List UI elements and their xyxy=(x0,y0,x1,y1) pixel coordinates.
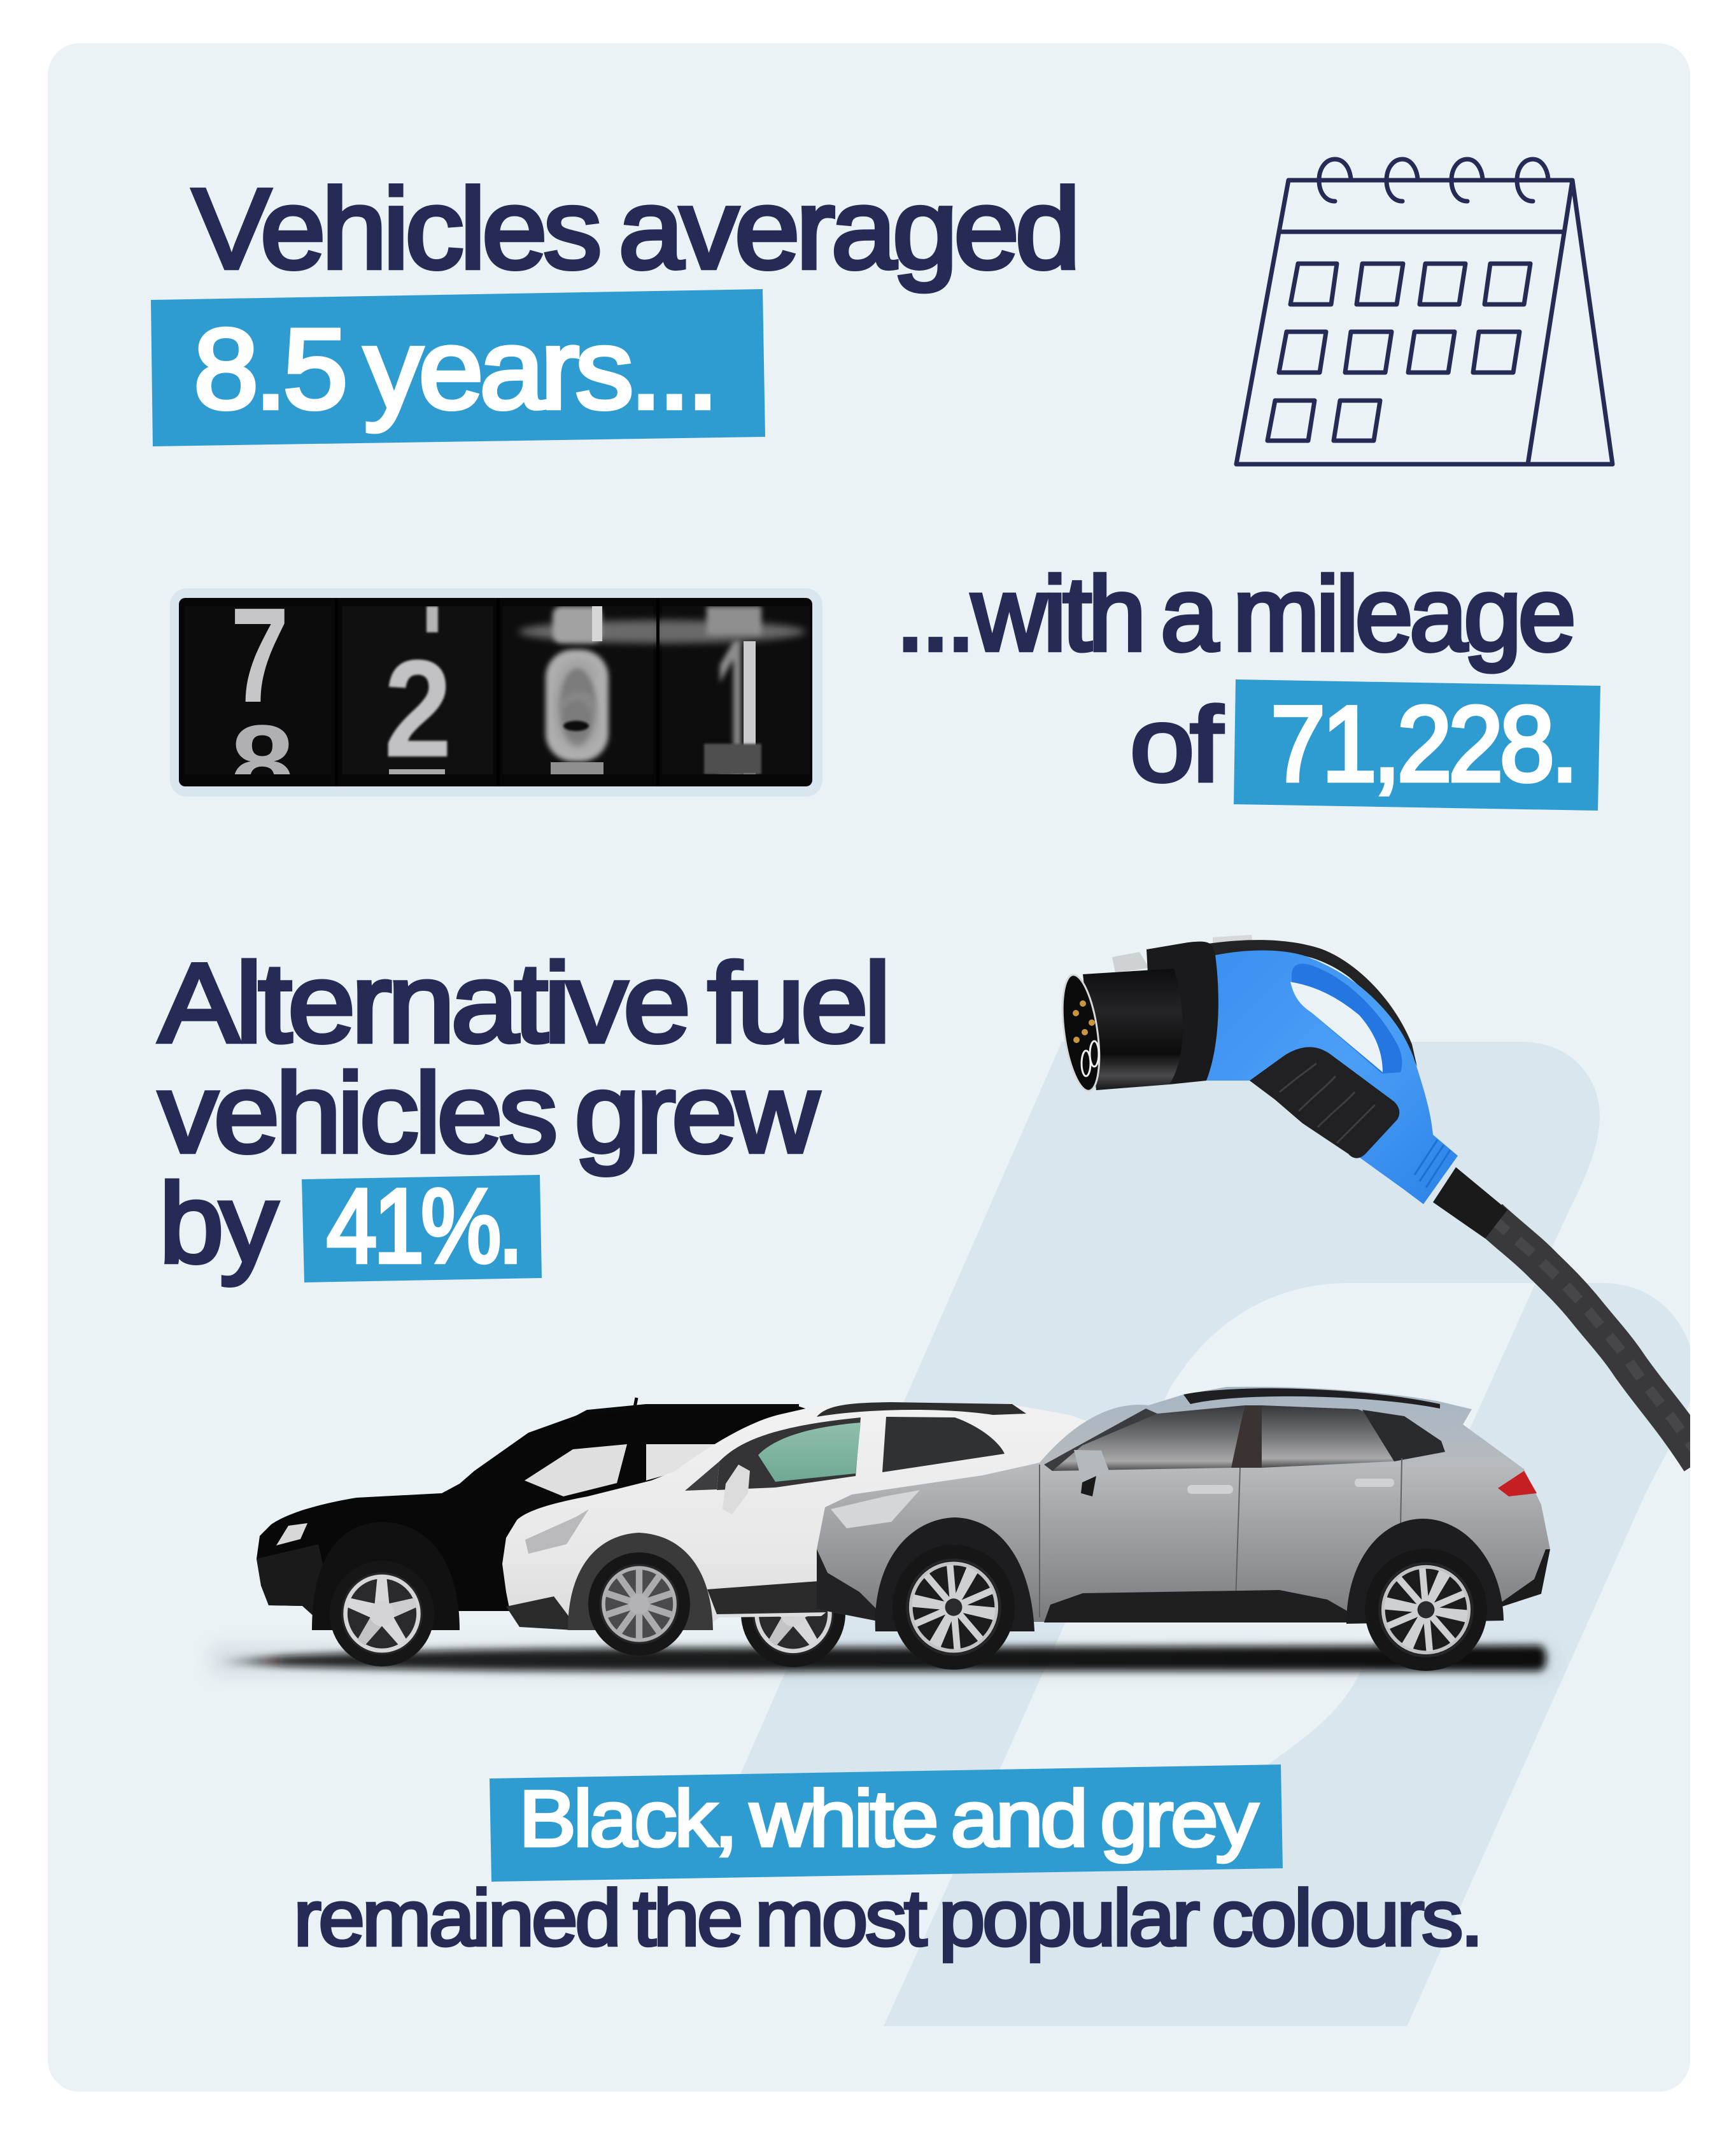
top cap xyxy=(1188,940,1417,1067)
heading: alternative fuel vehicles grew by xyxy=(159,940,887,1286)
heading: vehicles averaged: Vehicles averaged xyxy=(192,165,1076,292)
white car xyxy=(502,1402,1087,1656)
heading: with a mileage: ...with a mileage xyxy=(896,555,1572,672)
heading: alternative fuel vehicles grew by: vehicles grew xyxy=(159,1050,820,1176)
callout: 8.5 years xyxy=(151,289,765,446)
watermark logo shape xyxy=(700,1042,1695,2026)
cable xyxy=(1490,1218,1703,1463)
cars group xyxy=(210,1387,1553,1675)
odometer: 1 xyxy=(712,594,759,836)
callout: black, white and grey xyxy=(490,1764,1283,1882)
icon: desk calendar xyxy=(1236,159,1613,464)
text: of: of xyxy=(1130,686,1224,803)
connector collar xyxy=(1147,942,1218,1084)
silver clips xyxy=(1112,952,1149,973)
handle opening xyxy=(1290,964,1402,1074)
odometer: 8 xyxy=(230,703,294,824)
ground shadow xyxy=(210,1645,1553,1675)
blue ribbed collar xyxy=(1415,1140,1450,1188)
connector face xyxy=(1056,972,1106,1093)
grey car xyxy=(817,1387,1550,1671)
blue handle xyxy=(1206,950,1458,1204)
callout: 8.5 years: 8.5 years... xyxy=(194,305,715,432)
odometer: 7 xyxy=(230,579,289,730)
text: remained the most popular colours: remained the most popular colours. xyxy=(293,1874,1481,1963)
heading: alternative fuel vehicles grew by: by xyxy=(159,1160,278,1286)
EV charging connector and cable xyxy=(1056,935,1703,1463)
callout: 71,228: 71,228. xyxy=(1271,684,1575,804)
rubber grip xyxy=(1250,1047,1399,1158)
strain relief xyxy=(1433,1167,1507,1239)
callout: 41%: 41%. xyxy=(327,1167,520,1284)
black car xyxy=(257,1398,845,1667)
heading: alternative fuel vehicles grew by: Alternative fuel xyxy=(159,940,887,1066)
odometer: 2 xyxy=(384,632,452,786)
odometer: 6 xyxy=(547,634,605,776)
odometer xyxy=(170,588,822,797)
callout: black, white and grey: Black, white and grey xyxy=(519,1775,1259,1863)
connector barrel xyxy=(1083,969,1183,1090)
